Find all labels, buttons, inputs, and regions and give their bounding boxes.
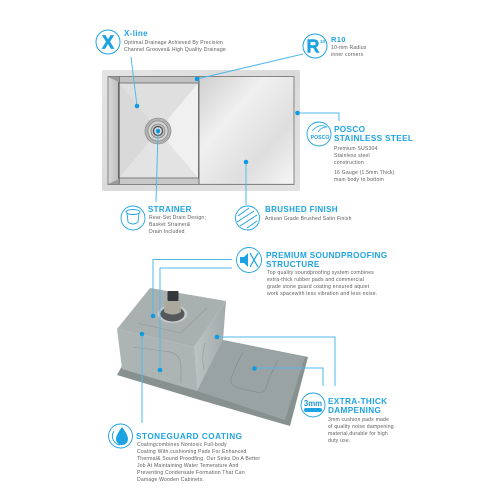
heading: POSCO stainless steel <box>334 125 413 143</box>
connector dots <box>135 77 300 372</box>
text: R10: 10-mm Radius <box>331 45 367 51</box>
text: stoneguard: Damage Wooden Cabinets. <box>137 477 204 483</box>
text: soundproofing: grade stone guard coating ensured aquiet <box>267 284 369 290</box>
heading: soundproofing: PREMIUM SOUNDPROOFING <box>266 251 388 260</box>
heading: extra-thick dampening: EXTRA-THICK <box>328 397 387 406</box>
heading: extra-thick dampening <box>328 397 387 415</box>
heading: soundproofing <box>266 251 388 269</box>
raised pads <box>133 347 181 383</box>
flange <box>117 340 308 426</box>
drainboard <box>199 77 294 184</box>
text: X-line: Optimal Drainage Achieved By Precision <box>124 40 223 46</box>
text: gauge: main body to bottom <box>334 177 384 183</box>
top face <box>117 288 226 347</box>
icon: 3mm: 3mm <box>304 399 322 408</box>
underside sink photo <box>117 288 308 426</box>
text: X-line <box>124 40 226 53</box>
icon: X-line: X <box>102 32 114 52</box>
text: strainer: Basket Strainer& <box>149 222 190 228</box>
text: stoneguard: Thermal& Sound Proodfing. Our Sinks Do A Better <box>137 456 260 462</box>
text: dampening: 3mm cushion pads made <box>328 417 389 423</box>
icon: 3mm <box>301 393 325 417</box>
top sink photo <box>102 70 300 191</box>
basin floor <box>119 83 198 131</box>
connector lines <box>131 54 339 423</box>
waste fitting <box>158 291 188 323</box>
text: gauge: 16 Gauge (1.5mm Thick) <box>334 170 395 176</box>
icon: POSCO: POSCO <box>311 135 329 141</box>
text: dampening: material,durable for high <box>328 431 388 437</box>
text: stoneguard: Coatingcombines Nontoxic Full-body <box>137 442 227 448</box>
text: strainer <box>149 215 206 235</box>
text: soundproofing: work spacewith less vibration and less noise. <box>267 291 377 297</box>
text: POSCO details: Premium SUS304 <box>334 146 378 152</box>
text: stoneguard <box>137 442 260 483</box>
heading: R10: R10 <box>331 35 346 44</box>
icon: water drop <box>108 424 132 448</box>
text: POSCO details <box>334 146 378 166</box>
text: soundproofing <box>267 270 377 297</box>
text: strainer: Drain Included <box>149 229 185 235</box>
text: dampening: duty use. <box>328 438 350 444</box>
text: POSCO details: Stainless steel <box>334 153 370 159</box>
side wall <box>194 301 226 391</box>
text: brushed finish: Artisan Grade Brushed Satin Finish <box>265 216 352 222</box>
front face <box>117 329 197 391</box>
text: stoneguard: Preventing Condensate Formation That Can <box>137 470 245 476</box>
heading: strainer: STRAINER <box>148 205 192 214</box>
drain strainer <box>145 118 171 144</box>
text: stoneguard: Job At Maintaining Water Temerature And <box>137 463 239 469</box>
icon: soundproofing <box>236 248 262 272</box>
deck face <box>197 340 305 420</box>
heading: stoneguard coating: STONEGUARD COATING <box>136 432 242 441</box>
heading: extra-thick dampening: DAMPENING <box>328 406 381 415</box>
text: dampening <box>328 417 394 444</box>
text: soundproofing: extra-thick rubber pads and commercial <box>267 277 364 283</box>
text: R10 <box>331 45 367 58</box>
text: gauge <box>334 170 395 183</box>
text: X-line: Channel Grooves& High Quality Drainage <box>124 47 226 53</box>
icon: POSCO <box>307 122 331 146</box>
text: stoneguard: Coating With.cushioning Pads For Enhanced <box>137 449 247 455</box>
text: POSCO details: construction <box>334 160 364 166</box>
icon: strainer <box>121 206 145 230</box>
heading: brushed finish: BRUSHED FINISH <box>265 205 338 214</box>
text: strainer: Rear-Set Drain Design; <box>149 215 206 221</box>
heading: soundproofing: STRUCTURE <box>266 260 320 269</box>
text: soundproofing: Top quality soundproofing system combines <box>267 270 374 276</box>
icon: X-line <box>96 30 120 54</box>
icon: brushed finish <box>236 206 260 230</box>
heading: POSCO stainless steel: POSCO <box>334 125 365 134</box>
icon: R10: 10 <box>320 39 325 44</box>
text: R10: inner corners <box>331 52 363 58</box>
heading: POSCO stainless steel: STAINLESS STEEL <box>334 134 413 143</box>
icon: R10 <box>303 34 327 58</box>
heading: X-line: X-line <box>124 29 148 38</box>
icon: R10: R <box>306 36 320 56</box>
text: dampening: of quality noise dampening <box>328 424 394 430</box>
